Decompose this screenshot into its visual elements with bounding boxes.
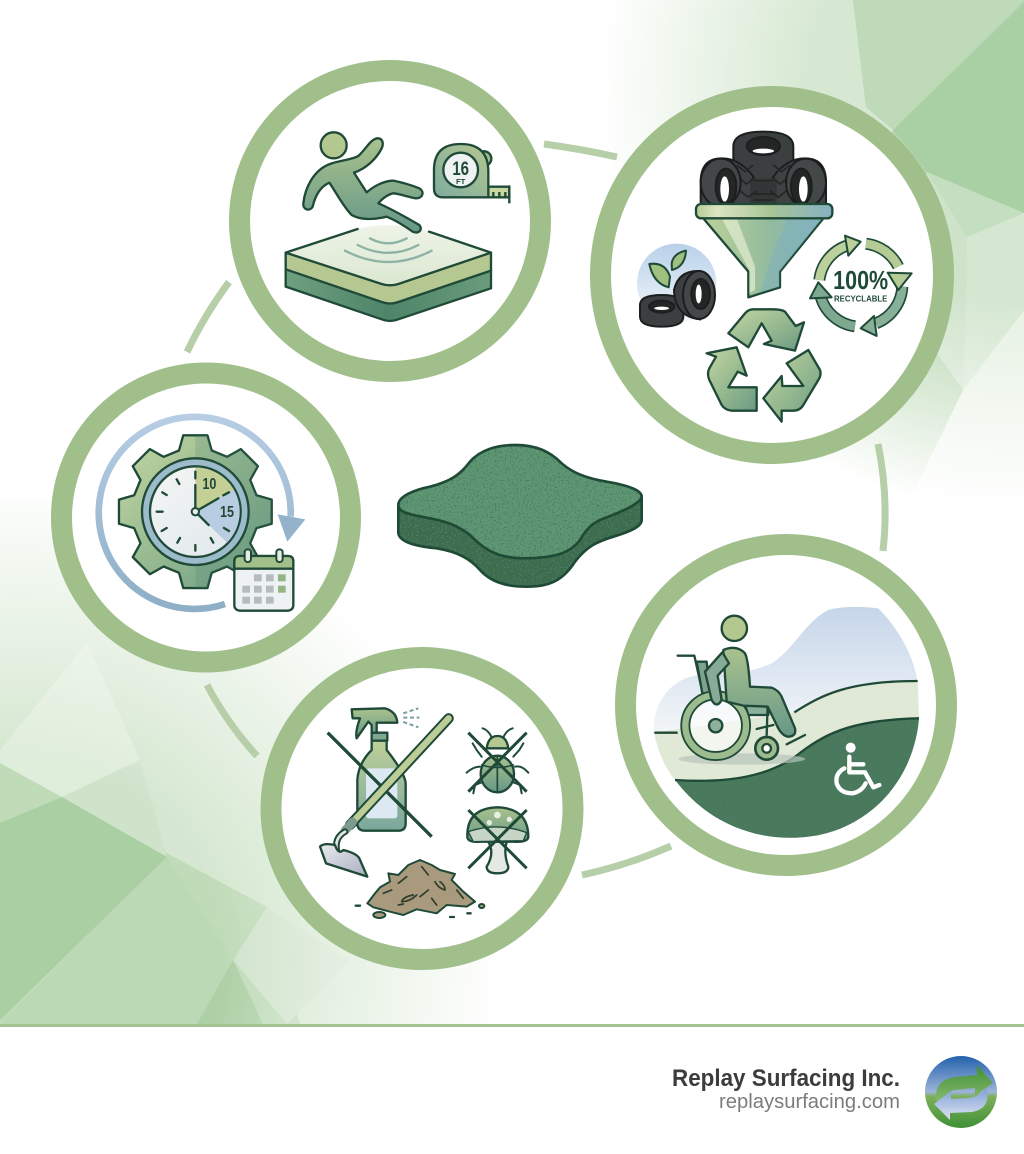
icon: tape measure 16 FT: FT	[456, 177, 466, 186]
icon: tire stack	[701, 132, 826, 207]
footer: company name	[672, 1065, 900, 1113]
icon: spray bottle	[352, 708, 419, 831]
ring	[240, 70, 540, 372]
icon: small tires with leaves	[637, 244, 716, 327]
footer: logo	[925, 1056, 997, 1128]
icon: 100% recyclable badge	[810, 236, 912, 336]
illustration: sloped ground scene	[653, 607, 919, 838]
ring	[626, 544, 946, 866]
icon: clock with 10 and 15 sectors	[142, 458, 249, 565]
panel: low maintenance	[271, 658, 573, 960]
ring	[271, 658, 573, 960]
icon: falling person	[303, 132, 423, 232]
icon: funnel	[696, 204, 832, 297]
icon: white accessibility symbol	[836, 743, 879, 793]
footer: company name: Replay Surfacing Inc.	[672, 1065, 900, 1092]
panel: accessibility	[626, 544, 946, 866]
panel: recycled tires	[600, 96, 944, 454]
icon: clock with 10 and 15 sectors: 10	[202, 476, 216, 493]
icon: circular blue arrow	[99, 417, 305, 609]
background: top-right faceted green	[638, 0, 1024, 478]
panel: fall protection	[240, 70, 540, 372]
ring	[62, 373, 350, 662]
icon: calendar	[234, 549, 293, 611]
icon: tape measure 16 FT: 16	[452, 159, 469, 180]
icon: 100% recyclable badge: 100%	[833, 265, 888, 295]
icon: wheelchair user	[678, 616, 805, 765]
icon: gear	[119, 435, 272, 588]
icon: clock with 10 and 15 sectors: 15	[220, 504, 234, 521]
icon: mulch pile	[356, 860, 484, 918]
icon: layered safety mat	[286, 225, 491, 321]
icon: hoe with cross	[320, 718, 449, 877]
icon: tape measure 16 FT	[434, 144, 509, 203]
footer: company name: replaysurfacing.com	[719, 1091, 900, 1113]
icon: crossed-out mushroom	[467, 807, 528, 873]
center: rubber surface slab	[398, 445, 642, 587]
background: bottom-left faceted green	[0, 530, 450, 1024]
icon: 100% recyclable badge: RECYCLABLE	[834, 294, 888, 304]
panel: fast installation	[62, 373, 350, 662]
bottom divider line	[0, 1024, 1024, 1027]
connector arcs between circles	[187, 144, 885, 875]
icon: crossed-out insect	[467, 728, 528, 793]
icon: recycling symbol	[707, 309, 821, 422]
ring	[600, 96, 944, 454]
